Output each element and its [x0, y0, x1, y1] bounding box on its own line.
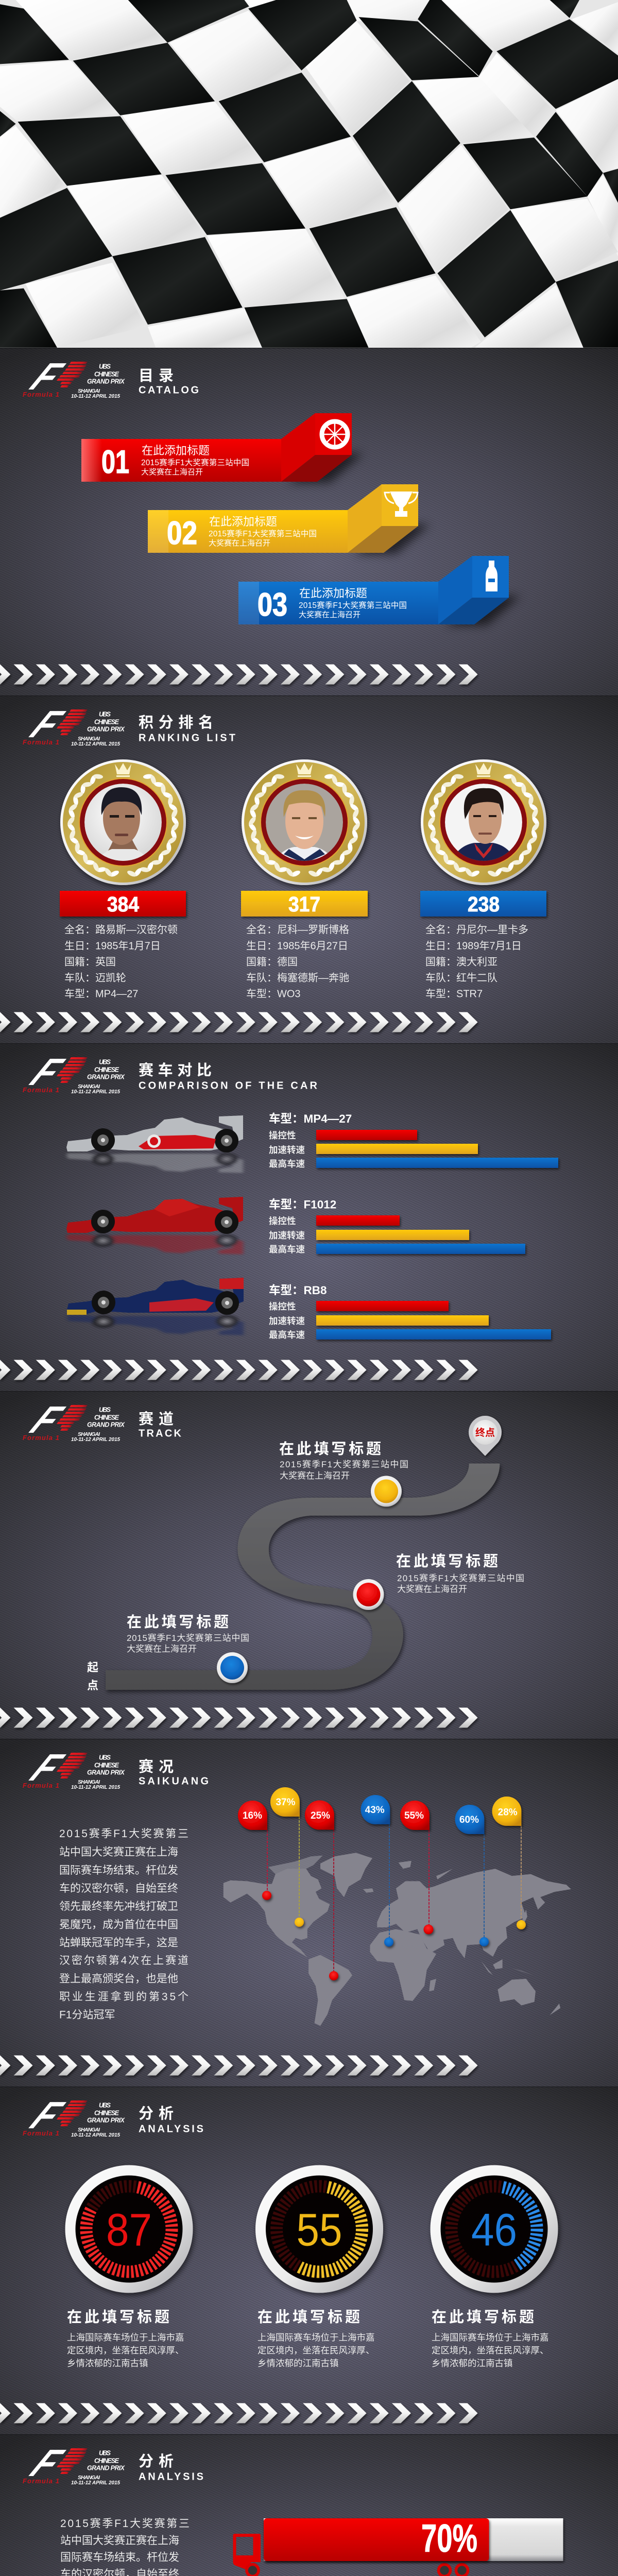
marker 37%: 37%	[276, 1797, 296, 1808]
gauge 46 text: 在此填写标题	[432, 2309, 534, 2326]
ribbon 03: 03	[258, 587, 287, 623]
marker 60%: 60%	[459, 1815, 479, 1825]
driver 3 details: 车队：红牛二队	[425, 972, 497, 984]
gauge 46	[431, 2165, 558, 2293]
header: track: CHINESE	[94, 1414, 119, 1421]
marker 16%: 16%	[243, 1810, 262, 1821]
stop 3 text	[279, 1440, 408, 1481]
chart: MP4-27 stats: 加速转速	[269, 1145, 305, 1155]
ribbon 02: 大奖赛在上海召开	[209, 539, 270, 548]
gauge 55: 55	[297, 2204, 342, 2256]
header: comparison: COMPARISON OF THE CAR	[139, 1080, 318, 1091]
chart: MP4-27 stats: 车型：MP4—27	[269, 1112, 352, 1125]
driver 2 details: 车队：梅塞德斯—奔驰	[246, 972, 349, 984]
gauge 87 text: 上海国际赛车场位于上海市嘉	[67, 2332, 184, 2343]
driver 1 details: 全名：路易斯—汉密尔顿	[64, 924, 178, 936]
chart: MP4-27 stats: 最高车速	[269, 1159, 305, 1169]
header: analysis: Formula 1	[23, 2477, 59, 2485]
start label: 点	[87, 1679, 98, 1692]
header: track: Formula 1	[23, 1434, 59, 1442]
header: analysis: 分析	[139, 2453, 174, 2470]
driver 2 details: 生日：1985年6月27日	[246, 940, 348, 952]
header: comparison: GRAND PRIX	[87, 1074, 125, 1081]
chevron divider	[0, 1360, 478, 1380]
header: comparison: CHINESE	[94, 1066, 119, 1074]
header: analysis: UBS	[99, 2102, 111, 2109]
medal 3 with portrait	[421, 759, 546, 885]
header: comparison: Formula 1	[23, 1086, 59, 1094]
header: catalog: 10-11-12 APRIL 2015	[71, 394, 120, 399]
driver 3 details: 生日：1989年7月1日	[425, 940, 522, 952]
stop 2 text: 在此填写标题	[396, 1553, 498, 1570]
chart: F1012 stats	[269, 1198, 525, 1255]
ribbon 01	[81, 413, 363, 483]
header: track	[23, 1398, 182, 1443]
pin: yellow stop	[371, 1476, 402, 1506]
score bar 384	[60, 891, 186, 917]
header: saikuang: CHINESE	[94, 1762, 119, 1769]
header: ranking: UBS	[99, 711, 111, 718]
header: saikuang: UBS	[99, 1754, 111, 1761]
panel: comparison of the car	[0, 1043, 618, 1391]
stop 3 text: 在此填写标题	[279, 1440, 381, 1458]
gauge 87 text: 定区境内，坐落在民风淳厚、	[67, 2345, 184, 2355]
stop 1 text	[127, 1614, 249, 1654]
header: analysis: ANALYSIS	[139, 2124, 203, 2135]
marker 37%	[270, 1787, 304, 1927]
icon: wheel	[322, 421, 348, 447]
header: saikuang	[23, 1746, 209, 1790]
header: analysis: GRAND PRIX	[87, 2116, 125, 2124]
gauge 46: 46	[471, 2204, 517, 2256]
header: track: 10-11-12 APRIL 2015	[71, 1437, 120, 1443]
header: comparison: 赛车对比	[139, 1062, 212, 1079]
ribbon 02: 2015赛季F1大奖赛第三站中国	[209, 529, 317, 538]
header: catalog	[23, 355, 199, 399]
stop 1 text: 大奖赛在上海召开	[127, 1643, 197, 1654]
header: saikuang: 10-11-12 APRIL 2015	[71, 1785, 120, 1790]
gauge 55	[255, 2165, 383, 2293]
stop 3 text: 大奖赛在上海召开	[280, 1470, 350, 1481]
driver 3 details	[425, 924, 528, 999]
driver 2	[241, 759, 368, 999]
driver 3 details: 国籍：澳大利亚	[425, 956, 497, 968]
chart: RB8 stats: 车型：RB8	[269, 1284, 327, 1297]
panel: ranking list	[0, 696, 618, 1043]
ribbon 02	[148, 484, 430, 554]
body text: F1分站冠军	[59, 2009, 115, 2021]
body text: 职业生涯拿到的第35个	[59, 1991, 188, 2003]
driver 3 details: 车型：STR7	[425, 988, 483, 999]
gauge 46 text: 上海国际赛车场位于上海市嘉	[432, 2332, 549, 2343]
gauge 87	[65, 2165, 193, 2293]
marker 43%	[360, 1795, 393, 1946]
driver 2 details	[246, 924, 349, 999]
header: ranking: 10-11-12 APRIL 2015	[71, 741, 120, 747]
gauge 55 text: 上海国际赛车场位于上海市嘉	[258, 2332, 375, 2343]
score bar 238	[420, 891, 546, 917]
header: ranking	[23, 703, 235, 747]
header: analysis: 10-11-12 APRIL 2015	[71, 2480, 120, 2486]
world map	[224, 1853, 571, 2026]
icon: trophy	[385, 492, 418, 517]
marker 55%	[400, 1801, 434, 1934]
marker 28%	[492, 1797, 526, 1929]
header: catalog: Formula 1	[23, 391, 59, 398]
header: saikuang: GRAND PRIX	[87, 1769, 125, 1776]
gauge 46 text	[432, 2309, 549, 2368]
header: ranking: SHANGAI	[78, 736, 100, 742]
chart: F1012 stats: 加速转速	[269, 1230, 305, 1241]
chart: RB8 stats: 操控性	[269, 1301, 296, 1312]
chart: F1012 stats: 车型：F1012	[269, 1198, 336, 1211]
chevron divider	[0, 1012, 478, 1032]
header: saikuang: SHANGAI	[78, 1779, 100, 1785]
header: analysis: F	[23, 2094, 72, 2137]
gauge 87: 87	[106, 2204, 152, 2256]
driver 3	[420, 759, 546, 999]
panel: analysis gauges	[0, 2087, 618, 2434]
header: comparison: 10-11-12 APRIL 2015	[71, 1089, 120, 1095]
header: comparison: SHANGAI	[78, 1083, 100, 1090]
marker 55%: 55%	[404, 1810, 424, 1821]
driver 2 details: 车型：WO3	[246, 988, 301, 999]
header: catalog: GRAND PRIX	[87, 378, 125, 385]
header: catalog: SHANGAI	[78, 388, 100, 394]
driver 1 details: 车队：迈凯轮	[64, 972, 126, 984]
header: comparison	[23, 1050, 318, 1095]
chart: F1012 stats: 最高车速	[269, 1244, 305, 1255]
chevron divider	[0, 2403, 478, 2424]
header: ranking: 积分排名	[139, 714, 213, 731]
driver 3 details: 全名：丹尼尔—里卡多	[425, 924, 528, 936]
header: catalog: 目录	[139, 368, 174, 384]
chart: RB8 stats: 最高车速	[269, 1330, 305, 1340]
gauge 55 text: 乡情浓郁的江南古镇	[258, 2358, 339, 2368]
header: analysis	[23, 2094, 203, 2138]
car: RB8	[67, 1278, 244, 1335]
chart: F1012 stats: 操控性	[269, 1216, 296, 1226]
marker 25%: 25%	[311, 1810, 330, 1821]
gauge 87 text	[67, 2309, 184, 2368]
stop 2 text	[396, 1553, 524, 1594]
panel: checkered flag banner	[0, 0, 618, 348]
header: track: TRACK	[139, 1428, 182, 1439]
body text	[59, 1828, 188, 2021]
header: track: UBS	[99, 1406, 111, 1414]
ribbon 02: 02	[167, 515, 197, 551]
header: catalog: CATALOG	[139, 384, 199, 396]
ribbon 03: 在此添加标题	[299, 587, 367, 600]
body text: 站蝉联冠军的车手，这是	[59, 1937, 178, 1948]
body text	[60, 2518, 190, 2576]
stop 1 text: 2015赛季F1大奖赛第三站中国	[127, 1633, 249, 1643]
header: analysis: ANALYSIS	[139, 2471, 203, 2482]
panel: analysis trucks	[0, 2434, 618, 2576]
icon: bottle	[486, 561, 497, 591]
header: catalog: F	[23, 355, 72, 398]
score bar 238: 238	[468, 892, 500, 916]
ribbon 01: 在此添加标题	[142, 444, 210, 457]
body text: 国际赛车场结束。杆位发	[59, 1865, 178, 1876]
pin: red stop	[353, 1579, 384, 1610]
body text: 站中国大奖赛正赛在上海	[60, 2535, 179, 2547]
car: F1012	[66, 1197, 243, 1255]
body text: 车的汉密尔顿，自始至终	[59, 1883, 178, 1894]
marker 60%	[455, 1805, 489, 1946]
header: analysis: UBS	[99, 2449, 111, 2456]
header: analysis: SHANGAI	[78, 2127, 100, 2133]
header: comparison: F	[23, 1050, 72, 1093]
gauge 87 text: 在此填写标题	[67, 2309, 169, 2326]
body text: 2015赛季F1大奖赛第三	[59, 1828, 188, 1840]
header: analysis: CHINESE	[94, 2458, 119, 2465]
driver 1 details: 国籍：英国	[64, 956, 116, 968]
header: saikuang: 赛况	[139, 1758, 174, 1775]
truck bar 70%: 70%	[421, 2517, 477, 2561]
body text: 2015赛季F1大奖赛第三	[60, 2518, 190, 2530]
ribbon 03: 2015赛季F1大奖赛第三站中国	[299, 600, 407, 610]
panel: catalog	[0, 348, 618, 696]
body text: 冕魔咒，成为首位在中国	[59, 1919, 178, 1931]
chart: MP4-27 stats	[269, 1112, 558, 1169]
body text: 站中国大奖赛正赛在上海	[59, 1846, 178, 1858]
car: MP4-27	[66, 1115, 243, 1173]
score bar 317	[241, 891, 368, 917]
panel: race status map	[0, 1739, 618, 2087]
header: track: F	[23, 1398, 72, 1441]
header: analysis: Formula 1	[23, 2129, 59, 2137]
medal 2 with portrait	[242, 759, 367, 885]
header: ranking: GRAND PRIX	[87, 725, 125, 733]
gauge 55 text: 定区境内，坐落在民风淳厚、	[258, 2345, 375, 2355]
ribbon 01: 01	[101, 444, 129, 480]
finish pin	[469, 1416, 502, 1456]
chevron divider	[0, 2055, 478, 2076]
driver 1 details: 生日：1985年1月7日	[64, 940, 161, 952]
body text: 汉密尔顿第4次在上赛道	[59, 1955, 188, 1967]
header: saikuang: Formula 1	[23, 1782, 59, 1789]
gauge 87 text: 乡情浓郁的江南古镇	[67, 2358, 148, 2368]
gauge 46 text: 乡情浓郁的江南古镇	[432, 2358, 513, 2368]
ribbon 01: 2015赛季F1大奖赛第三站中国	[141, 457, 249, 467]
header: ranking: Formula 1	[23, 738, 59, 746]
driver 2 details: 国籍：德国	[246, 956, 298, 968]
body text: 登上最高颁奖台，也是他	[59, 1973, 178, 1985]
header: analysis	[23, 2442, 203, 2486]
header: catalog: CHINESE	[94, 371, 119, 378]
score bar 317: 317	[288, 892, 320, 916]
header: analysis: GRAND PRIX	[87, 2465, 125, 2472]
marker 43%: 43%	[365, 1805, 385, 1816]
header: track: SHANGAI	[78, 1431, 100, 1437]
marker 25%	[305, 1800, 338, 1980]
header: catalog: UBS	[99, 363, 111, 370]
chevron divider	[0, 664, 478, 685]
stop 3 text: 2015赛季F1大奖赛第三站中国	[280, 1459, 408, 1469]
panel: track	[0, 1391, 618, 1739]
driver 1 details: 车型：MP4—27	[64, 988, 138, 999]
winding track road	[106, 1464, 500, 1690]
driver 1	[60, 759, 186, 999]
header: track: GRAND PRIX	[87, 1421, 125, 1428]
header: analysis: CHINESE	[94, 2109, 119, 2116]
header: ranking: F	[23, 703, 72, 745]
ribbon 03: 大奖赛在上海召开	[299, 611, 360, 619]
header: analysis: F	[23, 2442, 72, 2484]
header: analysis: 分析	[139, 2105, 174, 2122]
pin: blue stop	[217, 1652, 248, 1683]
driver 1 details	[64, 924, 178, 999]
ribbon 03	[238, 556, 520, 625]
header: ranking: RANKING LIST	[139, 733, 235, 744]
finish pin: 终点	[475, 1427, 495, 1438]
truck bar 70%	[233, 2517, 563, 2576]
stop 2 text: 2015赛季F1大奖赛第三站中国	[397, 1573, 524, 1583]
chart: MP4-27 stats: 操控性	[269, 1130, 296, 1141]
start label	[87, 1661, 98, 1692]
header: analysis: 10-11-12 APRIL 2015	[71, 2132, 120, 2138]
medal 1 with portrait	[60, 759, 186, 885]
ribbon 01: 大奖赛在上海召开	[141, 468, 203, 477]
chart: RB8 stats	[269, 1284, 551, 1340]
score bar 384: 384	[107, 892, 139, 916]
header: comparison: UBS	[99, 1058, 111, 1065]
marker 28%: 28%	[498, 1807, 518, 1818]
body text: 领先最终率先冲线打破卫	[59, 1901, 178, 1912]
stop 1 text: 在此填写标题	[127, 1614, 229, 1631]
gauge 46 text: 定区境内，坐落在民风淳厚、	[432, 2345, 549, 2355]
gauge 55 text	[258, 2309, 375, 2368]
chevron divider	[0, 1707, 478, 1728]
ribbon 02: 在此添加标题	[209, 515, 277, 528]
start label: 起	[87, 1661, 98, 1674]
gauge 55 text: 在此填写标题	[258, 2309, 360, 2326]
body text: 国际赛车场结束。杆位发	[60, 2551, 179, 2564]
header: analysis: SHANGAI	[78, 2475, 100, 2481]
header: track: 赛道	[139, 1411, 174, 1428]
header: saikuang: F	[23, 1746, 72, 1789]
stop 2 text: 大奖赛在上海召开	[397, 1584, 467, 1594]
chart: RB8 stats: 加速转速	[269, 1316, 305, 1326]
header: ranking: CHINESE	[94, 718, 119, 725]
driver 2 details: 全名：尼科—罗斯博格	[246, 924, 349, 936]
header: saikuang: SAIKUANG	[139, 1775, 209, 1787]
marker 16%	[238, 1801, 271, 1900]
